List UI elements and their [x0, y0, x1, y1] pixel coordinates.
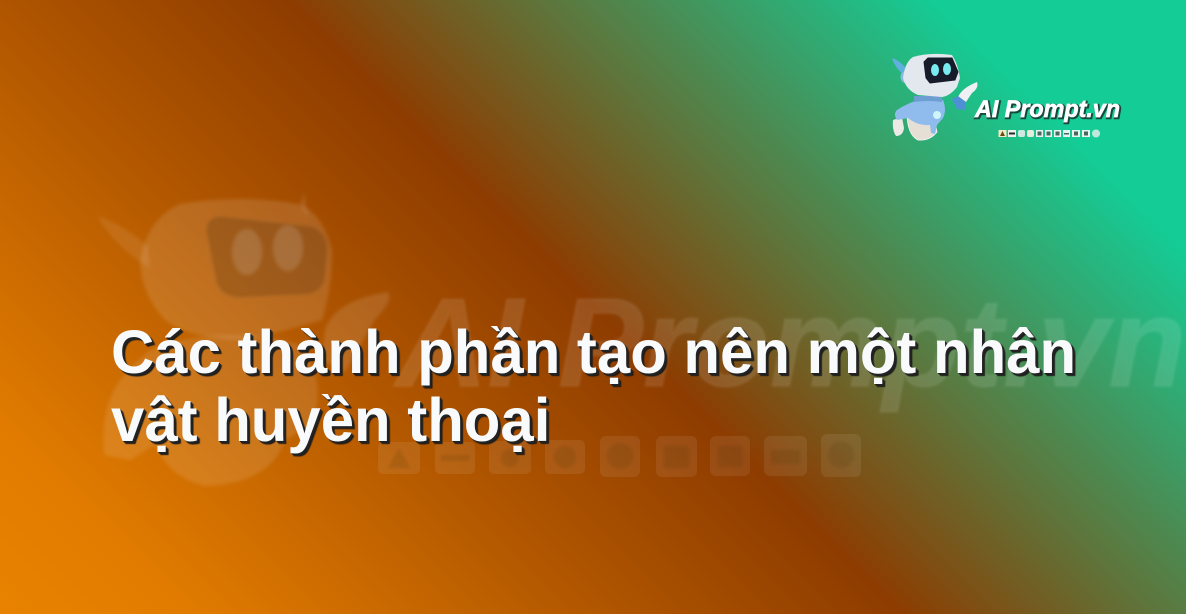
- robot eyes: [931, 64, 939, 76]
- robot body: [895, 99, 945, 134]
- title: [111, 318, 1076, 458]
- logo: AI Prompt.vn: [892, 54, 1122, 140]
- robot antenna ear: [892, 58, 908, 74]
- robot left hand: [893, 117, 904, 136]
- title: vật huyền thoại: [111, 386, 550, 454]
- robot raised arm: [958, 82, 977, 102]
- logo icon row: [998, 130, 1100, 138]
- robot visor: [924, 58, 958, 83]
- watermark wordmark: AI Prompt.vn: [393, 272, 1186, 413]
- watermark icon row: [378, 434, 861, 477]
- logo robot: [892, 54, 977, 140]
- watermark robot: [97, 192, 390, 486]
- logo wordmark: AI Prompt.vn: [975, 97, 1121, 124]
- logo wordmark: AI Prompt.vn: [974, 96, 1120, 123]
- robot lower body: [907, 116, 937, 140]
- watermark icon glyphs: [388, 442, 854, 469]
- robot neck shadow: [914, 96, 942, 102]
- title: Các thành phần tạo nên một nhân: [111, 318, 1076, 386]
- robot chest light: [933, 111, 941, 119]
- robot head: [903, 54, 960, 97]
